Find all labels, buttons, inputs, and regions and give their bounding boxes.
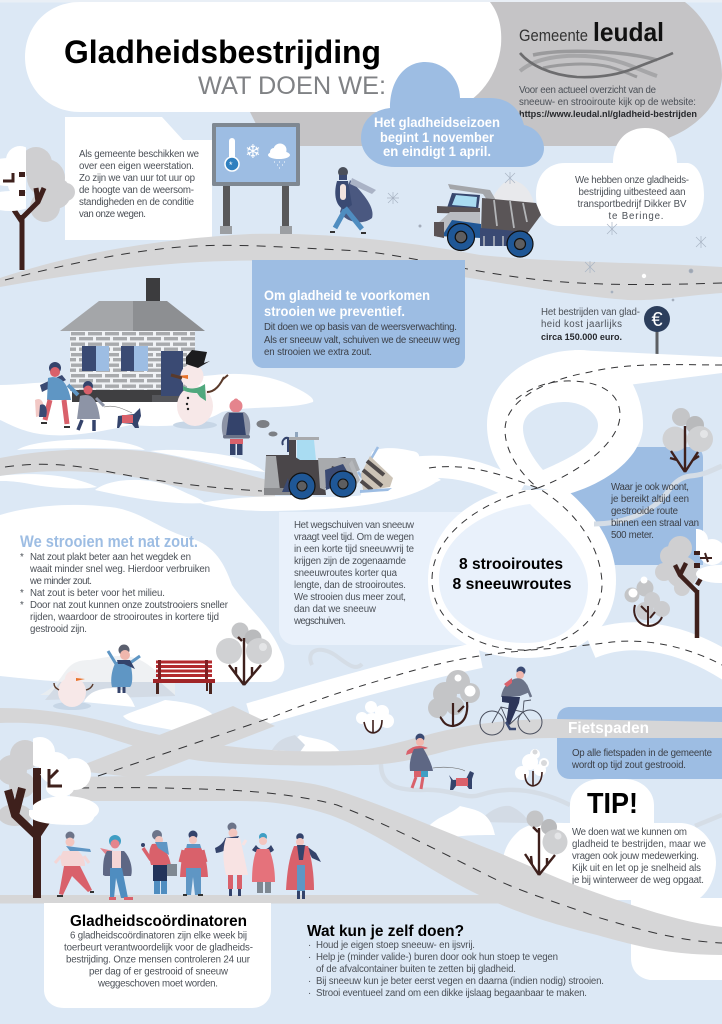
blue panel: within 500 meter bbox=[560, 447, 703, 565]
coordinator 5 bbox=[215, 822, 248, 896]
salt mound bbox=[490, 180, 534, 204]
woman walking dog bbox=[406, 734, 474, 790]
white cloud: contractor: transportbedrijf Dikker BV bbox=[578, 199, 687, 210]
text: within 500 meter: je bereikt altijd een bbox=[610, 494, 689, 505]
cost text: circa 150.000 euro. bbox=[541, 332, 622, 343]
weather board bbox=[212, 123, 300, 234]
text: wet salt: gestrooid zijn. bbox=[30, 624, 87, 635]
text: pushing snow: in een korte tijd sneeuwvrij te bbox=[294, 544, 414, 555]
coordinator 1 bbox=[55, 832, 94, 896]
text: within 500 meter: gestrooide route bbox=[611, 506, 678, 517]
dump truck bbox=[434, 184, 541, 257]
text: wet salt: Nat zout plakt beter aan het wegdek en bbox=[30, 552, 191, 563]
snow ground under bench bbox=[45, 682, 175, 700]
what can you do yourself: · bbox=[308, 952, 311, 963]
coordinators panel bbox=[44, 903, 271, 1008]
walking person with cape bbox=[330, 167, 376, 233]
panel: cycle paths: wordt op tijd zout gestrooid. bbox=[571, 760, 686, 771]
white cloud: contractor bbox=[536, 128, 704, 226]
weather station intro panel: Als gemeente beschikken we bbox=[79, 149, 199, 160]
cost text bbox=[541, 307, 640, 343]
blue panel: preventive bbox=[252, 260, 465, 368]
what can you do yourself bbox=[307, 923, 604, 999]
weather station intro panel: de hoogte van de weersom- bbox=[79, 185, 194, 196]
road 2 bbox=[0, 439, 435, 511]
weather station intro panel: van onze wegen. bbox=[79, 209, 146, 220]
text: wet salt: * bbox=[20, 588, 24, 599]
text: pushing snow: We strooien dus meer zout, bbox=[294, 592, 406, 603]
coordinators panel: 6 gladheidscoördinatoren zijn elke week bij bbox=[70, 930, 247, 942]
white tree near tip bbox=[515, 749, 549, 786]
blue cloud: season dates: Het gladheidseizoen bbox=[374, 114, 500, 130]
what can you do yourself: Wat kun je zelf doen? bbox=[307, 923, 464, 940]
panel: cycle paths: Fietspaden bbox=[568, 720, 649, 737]
thin paths lower right bbox=[381, 762, 722, 826]
house bbox=[60, 278, 205, 402]
blue cloud: season dates: en eindigt 1 april. bbox=[383, 143, 491, 159]
road network lower bbox=[0, 706, 722, 955]
white title pill bbox=[25, 2, 501, 112]
weather station intro panel bbox=[65, 117, 212, 240]
coordinator 3 bbox=[141, 830, 177, 894]
coordinator 2 bbox=[100, 835, 133, 900]
group of seven coordinators bbox=[55, 822, 321, 900]
coordinator 4 bbox=[180, 830, 208, 895]
coordinators panel: Gladheidscoördinatoren bbox=[70, 913, 247, 930]
logo: Gemeente Leudal: leudal bbox=[593, 17, 664, 47]
blue panel: preventive: en strooien we extra zout. bbox=[264, 347, 372, 358]
what can you do yourself: Strooi eventueel zand om een dikke ijslaag begaanbaar te maken. bbox=[316, 988, 587, 999]
grey tree at tip bbox=[525, 810, 568, 875]
tree top left bbox=[0, 146, 75, 270]
text: wet salt: We strooien met nat zout. bbox=[20, 533, 198, 551]
website note: Voor een actueel overzicht van de bbox=[519, 85, 656, 96]
snow loader bbox=[264, 432, 393, 499]
text panel: pushing snow bbox=[279, 512, 480, 645]
what can you do yourself: Houd je eigen stoep sneeuw- en ijsvrij. bbox=[316, 940, 475, 951]
what can you do yourself: Help je (minder valide-) buren door ook hun stoep te vegen bbox=[316, 952, 558, 963]
route counts bbox=[452, 556, 572, 593]
blue panel: preventive: strooien we preventief. bbox=[264, 304, 405, 319]
tip cloud: TIP! bbox=[587, 788, 638, 820]
text: pushing snow: krijgen zijn de zogenaamde bbox=[294, 556, 406, 567]
text: pushing snow: Het wegschuiven van sneeuw bbox=[294, 520, 415, 531]
cyclist bbox=[480, 666, 542, 735]
white cloud: contractor: te Beringe. bbox=[608, 211, 664, 222]
coordinators panel: per dag of er gestrooid of sneeuw bbox=[89, 966, 229, 978]
panel: cycle paths: Op alle fietspaden in de gemeente bbox=[572, 748, 712, 759]
tip cloud bbox=[503, 779, 716, 900]
website note bbox=[519, 85, 697, 120]
text: pushing snow: wegschuiven. bbox=[293, 616, 346, 627]
text: wet salt: rijden, waardoor de strooiroutes in kortere tijd bbox=[30, 612, 219, 623]
route counts: 8 sneeuwroutes bbox=[452, 576, 572, 593]
text: pushing snow: lengte, dan de strooiroutes. bbox=[294, 580, 406, 591]
weather station intro panel: over een eigen weerstation. bbox=[79, 161, 194, 172]
blue cloud: season dates bbox=[361, 62, 544, 167]
white tree lower bbox=[356, 701, 394, 733]
text: wet salt: * bbox=[20, 552, 24, 563]
snowman bbox=[171, 350, 228, 429]
what can you do yourself: Bij sneeuw kun je beter eerst vegen en daarna (indien nodig) strooien. bbox=[316, 976, 604, 987]
text: pushing snow: dan dat we sneeuw bbox=[294, 604, 377, 615]
what can you do yourself: · bbox=[308, 976, 311, 987]
road 1 bbox=[0, 234, 722, 300]
grey tree beside route bbox=[624, 576, 670, 626]
blue panel: preventive: Dit doen we op basis van de weersverwachting. bbox=[264, 322, 457, 333]
blue panel: preventive: Als er sneeuw valt, schuiven we de sneeuw weg bbox=[264, 335, 460, 346]
text: pushing snow: vraagt veel tijd. Om de wegen bbox=[294, 532, 414, 543]
coordinator 6 bbox=[252, 833, 275, 893]
snow flakes and dots bbox=[387, 172, 706, 301]
figure-eight white routes bbox=[250, 350, 722, 718]
tip cloud: vragen ook jouw medewerking. bbox=[572, 851, 699, 862]
grey tree by bench bbox=[216, 622, 272, 685]
euro road sign bbox=[644, 306, 670, 361]
coordinators panel: bestrijding. Onze mensen controleren 24 uur bbox=[66, 954, 251, 966]
weather station intro panel: Zo zijn we van uur tot uur op bbox=[79, 173, 195, 184]
snow pile behind plough bbox=[360, 448, 441, 498]
small snowman bbox=[53, 671, 93, 710]
child playing bbox=[108, 644, 140, 693]
cost text: heid kost jaarlijks bbox=[541, 319, 622, 330]
website note: sneeuw- en strooiroute kijk op de website: bbox=[519, 97, 696, 108]
text: within 500 meter: Waar je ook woont, bbox=[611, 482, 689, 493]
text: pushing snow: sneeuwroutes korter qua bbox=[294, 568, 398, 579]
text: wet salt: waait minder snel weg. Hierdoor verbruiken bbox=[29, 564, 210, 575]
weather board: ❄ bbox=[245, 141, 261, 163]
tip cloud: gladheid te bestrijden, maar we bbox=[572, 839, 706, 850]
white blob bottom right bbox=[631, 898, 722, 980]
thin path in blue panel bbox=[594, 466, 722, 524]
snow under house bbox=[0, 374, 313, 435]
blue panel: preventive: Om gladheid te voorkomen bbox=[264, 288, 430, 303]
tip cloud: We doen wat we kunnen om bbox=[572, 827, 687, 838]
what can you do yourself: · bbox=[308, 940, 311, 951]
weather station intro panel: standigheden en de conditie bbox=[79, 197, 194, 208]
snow patches bbox=[123, 700, 528, 838]
exhaust smoke bbox=[256, 420, 278, 436]
what can you do yourself: · bbox=[308, 988, 311, 999]
what can you do yourself: of de afvalcontainer buiten te zetten bij gladheid. bbox=[316, 964, 516, 975]
snow mound by snowman bbox=[84, 688, 135, 707]
tip cloud: Kijk uit en let op je snelheid als bbox=[572, 863, 701, 874]
white cloud: contractor: We hebben onze gladheids- bbox=[575, 175, 689, 186]
text: wet salt: we minder zout. bbox=[29, 576, 92, 587]
grey tree on panel bbox=[662, 408, 713, 472]
text: within 500 meter: 500 meter. bbox=[611, 530, 654, 541]
route counts: 8 strooiroutes bbox=[459, 556, 563, 573]
euro road sign: € bbox=[651, 309, 663, 331]
subtitle: WAT DOEN WE: bbox=[198, 72, 386, 100]
text: within 500 meter: binnen een straal van bbox=[611, 518, 699, 529]
text: within 500 meter bbox=[610, 482, 699, 541]
logo: Gemeente Leudal: Gemeente bbox=[519, 27, 588, 45]
tip cloud: je bij winterweer de weg opgaat. bbox=[571, 875, 704, 886]
text: pushing snow bbox=[293, 520, 415, 627]
grey tree by cycle path bbox=[428, 670, 480, 727]
person in hood bbox=[222, 398, 250, 455]
coordinators panel: weggeschoven moet worden. bbox=[97, 978, 218, 990]
weather board: * bbox=[229, 160, 233, 170]
tree at right edge bbox=[655, 529, 722, 638]
logo: Gemeente Leudal bbox=[519, 17, 673, 77]
main title: Gladheidsbestrijding bbox=[64, 34, 381, 70]
white cloud: contractor: bestrijding uitbesteed aan bbox=[578, 187, 686, 198]
text: wet salt: Nat zout is beter voor het milieu. bbox=[30, 588, 165, 599]
website note: https://www.leudal.nl/gladheid-bestrijden bbox=[519, 109, 697, 120]
text: wet salt bbox=[20, 533, 229, 635]
white snow blob: wet salt bbox=[0, 505, 284, 683]
coordinator 7 bbox=[286, 833, 321, 899]
text: wet salt: Door nat zout kunnen onze zoutstrooiers sneller bbox=[30, 600, 229, 611]
panel: cycle paths bbox=[557, 707, 722, 779]
family with dog bbox=[35, 362, 141, 431]
grey header panel bbox=[250, 2, 722, 146]
cost text: Het bestrijden van glad- bbox=[541, 307, 640, 318]
red bench bbox=[153, 660, 215, 694]
hook path near panel bbox=[310, 650, 362, 667]
winter scene hill bbox=[40, 656, 175, 695]
large tree lower left bbox=[0, 737, 99, 898]
blue cloud: season dates: begint 1 november bbox=[380, 129, 495, 145]
text: wet salt: * bbox=[20, 600, 24, 611]
coordinators panel: toerbeurt verantwoordelijk voor de gladheids- bbox=[64, 942, 253, 954]
